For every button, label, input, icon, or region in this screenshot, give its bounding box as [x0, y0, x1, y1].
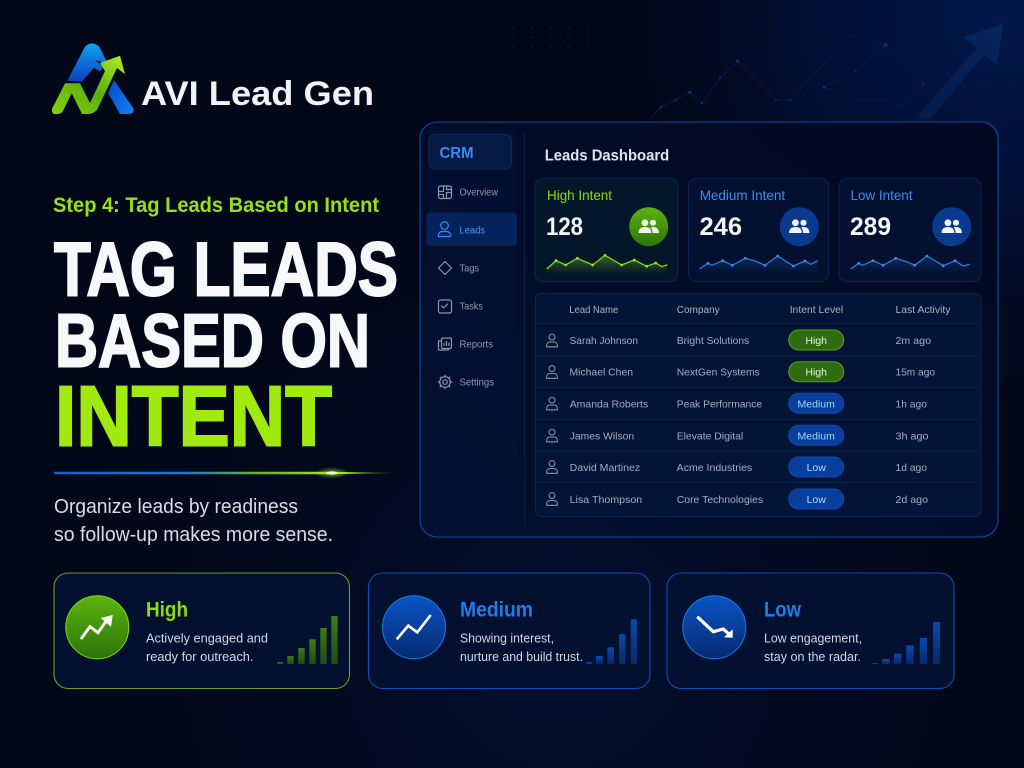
logo [52, 43, 374, 114]
bar chart [586, 619, 637, 664]
panel: high [54, 573, 350, 688]
table header [569, 304, 951, 316]
table header: Lead Name [569, 304, 618, 316]
table header: Last Activity [896, 304, 951, 316]
panel: high: High [146, 599, 188, 622]
card: medium intent [688, 178, 828, 282]
row: Amanda Roberts [547, 393, 927, 413]
step label: Step 4: Tag Leads Based on Intent [53, 194, 379, 217]
panel: low [667, 573, 954, 688]
row: James Wilson [547, 425, 929, 445]
panel: low: stay on the radar. [764, 649, 861, 664]
row: Michael Chen: Michael Chen [570, 367, 633, 379]
table header: Intent Level [790, 304, 843, 316]
card: medium intent: 246 [700, 213, 742, 241]
main title: BASED ON [55, 298, 370, 382]
row: Lisa Thompson [547, 489, 928, 509]
row: James Wilson: Elevate Digital [677, 430, 743, 442]
subtitle: Organize leads by readiness [54, 496, 298, 518]
nav: overview [438, 186, 498, 199]
row: Amanda Roberts: 1h ago [896, 398, 927, 410]
nav: reports [438, 338, 493, 351]
row: James Wilson: James Wilson [570, 430, 634, 442]
dashboard heading: Leads Dashboard [545, 148, 669, 164]
row: Amanda Roberts: Peak Performance [677, 398, 762, 410]
row: David Martinez [547, 457, 927, 477]
icon: trend down [683, 596, 746, 659]
row: Lisa Thompson: Core Technologies [677, 494, 763, 506]
row: Sarah Johnson [547, 330, 931, 350]
row: Lisa Thompson: Lisa Thompson [570, 494, 642, 506]
main title: INTENT [55, 370, 332, 465]
main title [54, 228, 398, 465]
card: low intent: 289 [850, 213, 891, 241]
panel: low: Low [764, 599, 802, 622]
bar chart [872, 622, 940, 664]
nav: tasks: Tasks [460, 301, 483, 313]
card: medium intent: Medium Intent [700, 188, 785, 203]
table header: Company [677, 304, 720, 316]
nav: settings [438, 375, 494, 389]
nav: tasks [438, 300, 483, 313]
row: Sarah Johnson: High [805, 335, 827, 347]
panel: medium: Showing interest, [460, 631, 554, 646]
card: high intent [535, 178, 678, 282]
row: Michael Chen: High [805, 367, 827, 379]
bar chart [277, 616, 338, 664]
row: Sarah Johnson: Sarah Johnson [570, 335, 638, 347]
card: low intent: Low Intent [850, 188, 913, 203]
nav: leads active: Leads [460, 225, 485, 237]
main title: TAG LEADS [54, 228, 398, 313]
row: James Wilson: Medium [798, 430, 835, 442]
panel: medium: nurture and build trust. [460, 649, 583, 664]
row: Michael Chen [547, 362, 935, 382]
row: Amanda Roberts: Amanda Roberts [570, 398, 648, 410]
row: David Martinez: Acme Industries [677, 462, 752, 474]
nav: leads active [426, 212, 517, 246]
row: David Martinez: Low [807, 462, 826, 474]
background decoration: rising chart and arrow [509, 23, 1021, 121]
row: Michael Chen: NextGen Systems [677, 367, 760, 379]
row: Lisa Thompson: Low [807, 494, 826, 506]
card: low intent [839, 178, 981, 282]
panel: medium [368, 573, 650, 688]
icon: trend wave [382, 596, 446, 659]
leads table [536, 294, 981, 516]
panel: high: ready for outreach. [146, 649, 254, 664]
logo mark [52, 43, 134, 114]
row: Sarah Johnson: 2m ago [896, 335, 931, 347]
sidebar [426, 134, 517, 389]
row: James Wilson: 3h ago [896, 430, 929, 442]
panel: medium: Medium [460, 599, 533, 622]
CRM badge: CRM [440, 145, 474, 162]
card: high intent: High Intent [547, 188, 612, 203]
icon: trend up [66, 596, 129, 659]
card: high intent: 128 [546, 213, 583, 241]
subtitle [54, 496, 333, 546]
CRM badge [429, 134, 512, 169]
panel: high: Actively engaged and [146, 631, 268, 646]
row: David Martinez: 1d ago [896, 462, 927, 474]
row: Amanda Roberts: Medium [798, 398, 835, 410]
row: Michael Chen: 15m ago [896, 367, 935, 379]
gradient divider with flare [54, 467, 400, 479]
logo wordmark: AVI Lead Gen [141, 75, 374, 113]
nav: tags [438, 262, 479, 275]
row: Sarah Johnson: Bright Solutions [677, 335, 749, 347]
nav: tags: Tags [460, 263, 479, 275]
row: Lisa Thompson: 2d ago [896, 494, 928, 506]
nav: reports: Reports [460, 339, 493, 351]
nav: settings: Settings [460, 377, 494, 389]
panel: low: Low engagement, [764, 631, 862, 646]
subtitle: so follow-up makes more sense. [54, 524, 333, 546]
nav: overview: Overview [460, 187, 498, 199]
panel: CRM dashboard [420, 122, 998, 537]
row: David Martinez: David Martinez [570, 462, 640, 474]
